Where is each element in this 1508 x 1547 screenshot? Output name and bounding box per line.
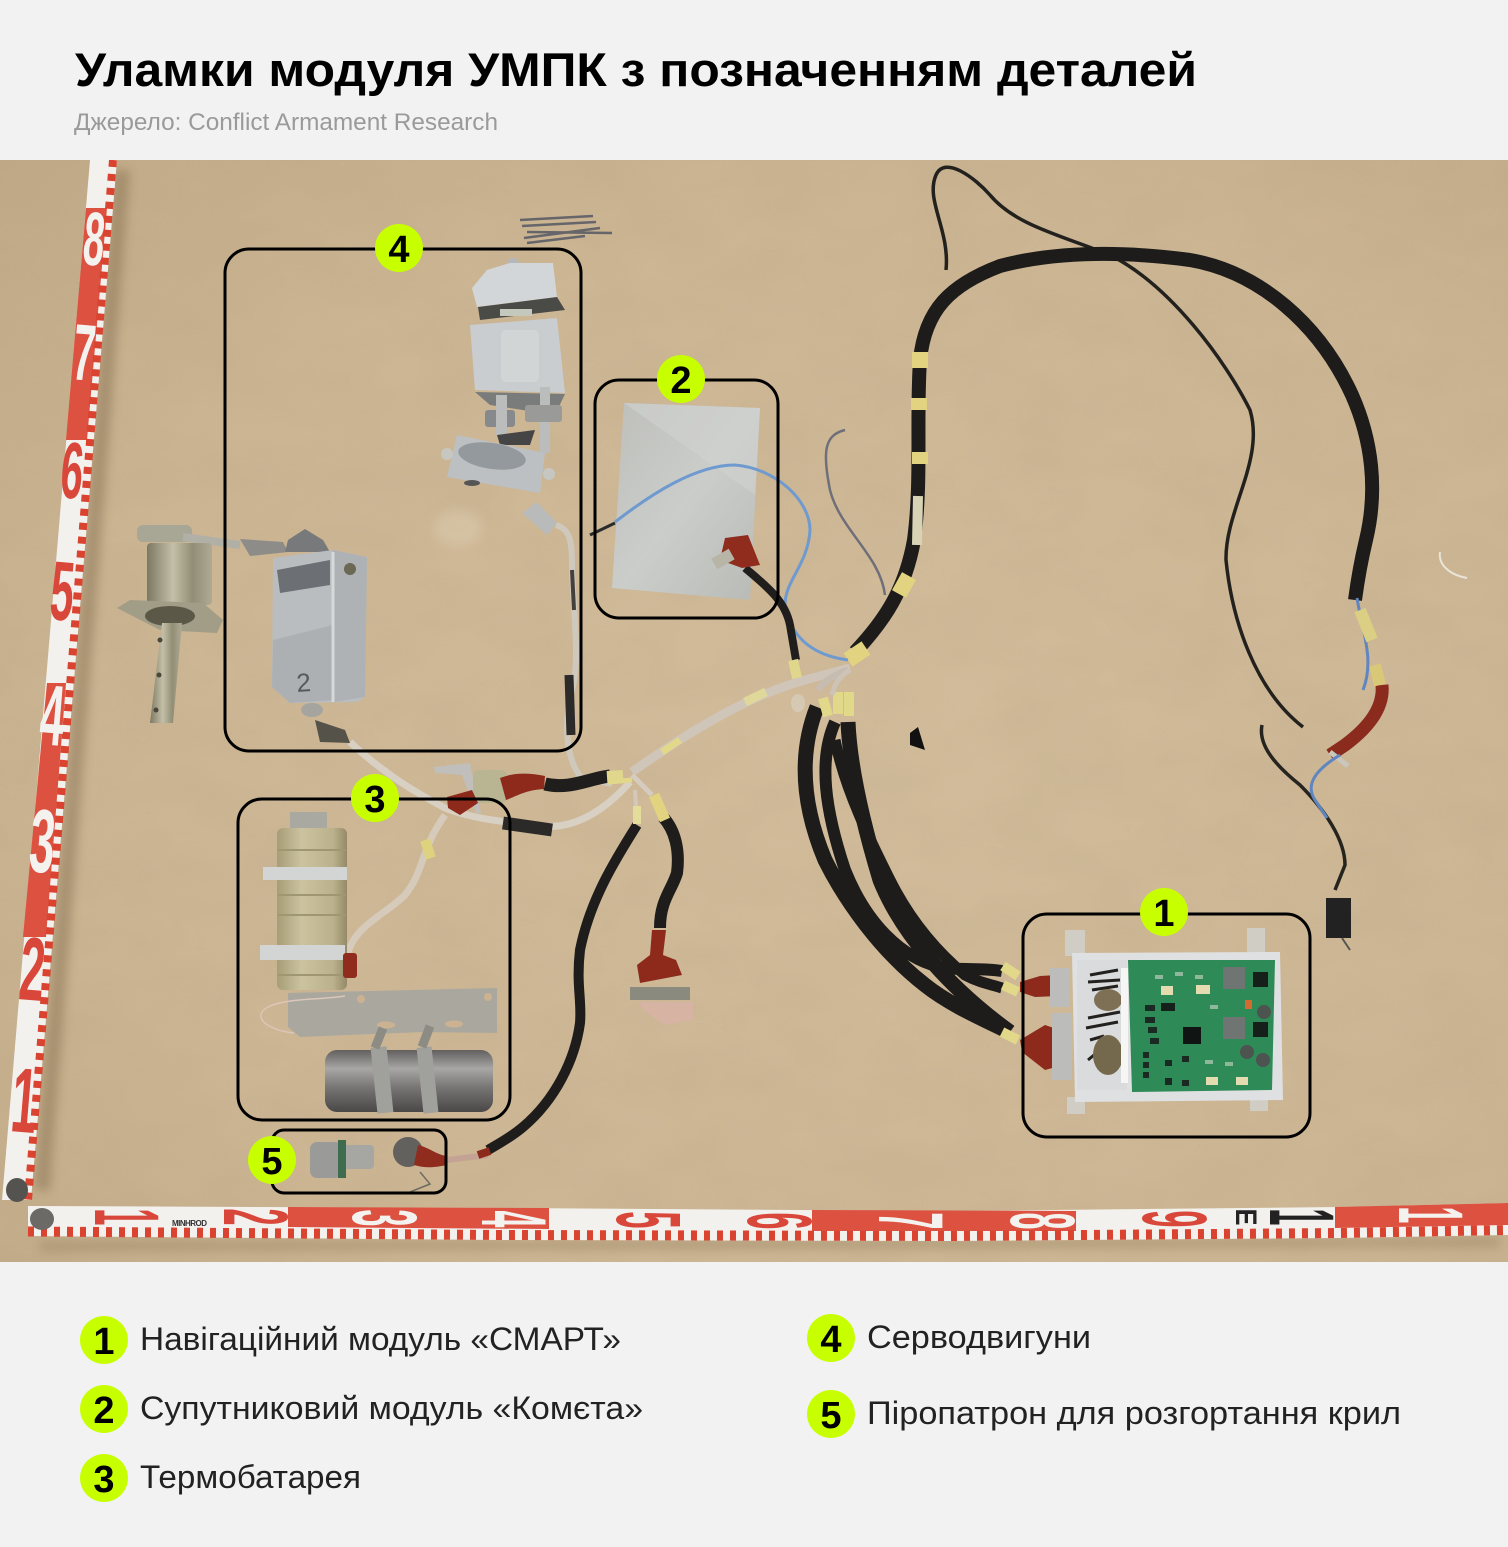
legend item 5 bbox=[807, 1390, 1401, 1438]
left measuring ruler: 6 bbox=[57, 426, 87, 517]
harness tape markers bbox=[848, 352, 920, 660]
marker frame 3 bbox=[238, 774, 510, 1120]
harness tail wires bbox=[1357, 598, 1368, 690]
icon: wiring bay bbox=[1077, 960, 1128, 1090]
cable tape markers bbox=[823, 692, 1018, 1040]
black cables to navigation module bbox=[805, 707, 1010, 1032]
main harness thick cable bbox=[848, 254, 1382, 766]
panel: wing pyro cartridge bbox=[310, 1137, 447, 1192]
photo panel: debris on canvas bbox=[0, 160, 1508, 1262]
bottom measuring ruler: MINHROD bbox=[172, 1219, 207, 1228]
ruler shadows bbox=[40, 170, 1500, 1246]
left measuring ruler: 7 bbox=[69, 308, 99, 399]
bottom measuring ruler: 2 bbox=[204, 1209, 307, 1225]
nails bbox=[520, 216, 612, 243]
left measuring ruler: 3 bbox=[26, 792, 59, 893]
bottom measuring ruler: 1 bbox=[75, 1209, 178, 1225]
bottom measuring ruler: 8 bbox=[991, 1213, 1094, 1229]
marker frame 2: 2 bbox=[670, 360, 692, 402]
bottom measuring ruler: 9 bbox=[1123, 1211, 1226, 1227]
bottom measuring ruler: 7 bbox=[859, 1213, 962, 1229]
legend item 3: 3 bbox=[93, 1459, 115, 1501]
left measuring ruler: 5 bbox=[47, 545, 78, 640]
black thin wire loop bbox=[933, 167, 1303, 727]
icon: connector boots bbox=[1020, 968, 1072, 1080]
legend bbox=[80, 1314, 1401, 1502]
canvas background bbox=[0, 160, 1508, 1262]
pale wire trunk bbox=[347, 525, 850, 955]
bottom measuring ruler: 1 bbox=[1379, 1207, 1482, 1223]
icon: steel cylinder bbox=[325, 1050, 493, 1112]
icon: upper servo bbox=[441, 258, 565, 535]
legend item 4: Серводвигуни bbox=[867, 1319, 1091, 1355]
icon: red connector boot bbox=[720, 535, 760, 568]
marker frame 5: 5 bbox=[261, 1141, 283, 1183]
panel: navigation module bbox=[1020, 928, 1283, 1114]
marker frame 1: 1 bbox=[1153, 893, 1175, 935]
icon: red wire sleeve bbox=[343, 953, 357, 978]
icon: coil battery bbox=[260, 812, 347, 990]
legend item 1 bbox=[80, 1316, 621, 1364]
icon: antenna wires bbox=[590, 465, 848, 678]
icon: metal plate bbox=[612, 403, 760, 600]
marker frame 4: 4 bbox=[388, 229, 410, 271]
icon: large servo: 2 bbox=[295, 667, 312, 698]
DB connector with red boot bbox=[630, 930, 693, 1025]
bottom measuring ruler: E bbox=[1230, 1209, 1263, 1225]
icon: circuit board bbox=[1128, 960, 1275, 1092]
clear plastic scrap bbox=[791, 694, 805, 712]
satellite module thin wires bbox=[826, 430, 885, 595]
central bracket and connector bbox=[433, 763, 545, 815]
icon: aluminium frame bbox=[1072, 952, 1283, 1102]
legend item 3: Термобатарея bbox=[140, 1459, 361, 1495]
canvas mottling bbox=[0, 160, 1508, 1262]
legend item 1: Навігаційний модуль «СМАРТ» bbox=[140, 1321, 621, 1357]
icon: pyro connector bbox=[393, 1137, 447, 1192]
bottom measuring ruler: 4 bbox=[462, 1211, 565, 1227]
icon: mounting plate bbox=[288, 988, 497, 1037]
bottom measuring ruler bbox=[28, 1203, 1508, 1241]
switch and lower thin wires bbox=[1261, 725, 1351, 950]
left measuring ruler bbox=[2, 160, 117, 1202]
panel: thermal battery bbox=[260, 812, 497, 1114]
legend item 4 bbox=[807, 1314, 1091, 1362]
left measuring ruler: 1 bbox=[8, 1049, 41, 1153]
icon: piston actuator bbox=[117, 525, 240, 723]
legend item 2 bbox=[80, 1385, 643, 1433]
left measuring ruler: 8 bbox=[80, 196, 108, 282]
legend item 5: Піропатрон для розгортання крил bbox=[867, 1395, 1401, 1431]
bottom measuring ruler: 5 bbox=[597, 1212, 700, 1228]
legend item 1: 1 bbox=[93, 1321, 115, 1363]
source line: Джерело: Conflict Armament Research bbox=[74, 109, 498, 136]
marker frame 1 bbox=[1023, 888, 1310, 1137]
bottom measuring ruler: 1 bbox=[1250, 1209, 1353, 1225]
marker frame 3: 3 bbox=[364, 779, 386, 821]
title: Уламки модуля УМПК з позначенням деталей bbox=[75, 43, 1197, 96]
marker frame 4 bbox=[225, 224, 581, 751]
panel: satellite module bbox=[590, 403, 848, 678]
legend item 3 bbox=[80, 1454, 361, 1502]
legend item 4: 4 bbox=[820, 1319, 842, 1361]
left measuring ruler: 2 bbox=[16, 920, 49, 1021]
left measuring ruler: 4 bbox=[37, 667, 68, 765]
splatter marks bbox=[436, 511, 480, 545]
legend item 2: 2 bbox=[93, 1390, 115, 1432]
junction branch cables bbox=[447, 775, 678, 1160]
stray items bbox=[910, 552, 1467, 750]
marker frame 2 bbox=[595, 355, 778, 618]
icon: pyro fitting bbox=[310, 1140, 374, 1178]
bottom measuring ruler: 3 bbox=[333, 1210, 436, 1226]
marker frame 5 bbox=[248, 1130, 446, 1193]
icon: large servo bbox=[240, 529, 367, 743]
icon: mounting flanges bbox=[1065, 928, 1268, 1114]
legend item 5: 5 bbox=[820, 1395, 842, 1437]
bottom measuring ruler: 6 bbox=[728, 1213, 831, 1229]
panel: servo motors bbox=[117, 258, 565, 743]
legend item 2: Супутниковий модуль «Комєта» bbox=[140, 1390, 643, 1426]
